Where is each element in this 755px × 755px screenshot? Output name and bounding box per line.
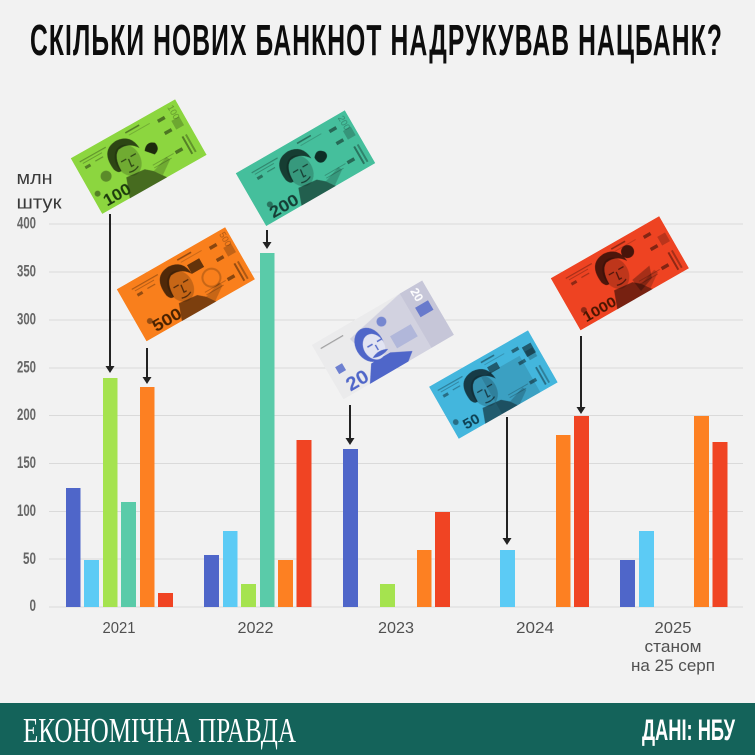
x axis year labels: 2021 (102, 620, 136, 637)
y axis labels (17, 214, 36, 615)
arrow: 200 note to 2022 teal bar (262, 230, 272, 249)
bars: 2022 (204, 253, 312, 607)
banknote: 1000: 1000 (580, 293, 620, 326)
banknote: 500 (117, 227, 257, 346)
bars: 2023 (343, 449, 450, 607)
y axis labels: 400 (17, 214, 36, 232)
banknote: 20: 20 (407, 286, 426, 304)
banknote: 50: 50 (460, 410, 483, 433)
y axis labels: 150 (17, 454, 36, 472)
banknote: 200: 200 (266, 190, 302, 222)
y axis labels: 300 (17, 310, 36, 328)
x axis year labels (102, 620, 715, 675)
y axis labels: 350 (17, 262, 36, 280)
banknote: 100: 100 (100, 179, 134, 210)
arrow: 50 note to 2024 cyan bar (502, 417, 512, 545)
bars: 2021 (66, 378, 173, 607)
arrow: 500 note to 2021 orange bar (142, 348, 152, 384)
y axis labels: 100 (17, 502, 36, 520)
banknote: 200: 200 (336, 114, 352, 132)
banknote: 50 (429, 330, 561, 445)
logo: Економічна правда: ЕКОНОМІЧНА ПРАВДА (23, 711, 297, 750)
banknote: 500: 500 (217, 230, 233, 248)
footer band (0, 703, 755, 755)
arrow: 100 note to 2021 green bar (106, 214, 114, 373)
y axis labels: 250 (17, 358, 36, 376)
y axis labels: 0 (30, 597, 36, 615)
x axis year labels: станом (644, 638, 702, 656)
banknote: 20 (312, 280, 455, 401)
x axis year labels: на 25 серп (631, 657, 715, 675)
banknote: 1000 (551, 216, 691, 334)
y axis labels: 200 (17, 406, 36, 424)
banknote: 500: 500 (149, 304, 185, 336)
axis unit label: штук (16, 192, 62, 212)
banknote: 20: 20 (343, 366, 373, 396)
x axis year labels: 2024 (516, 620, 554, 637)
arrow: 1000 note to 2024 red bar (576, 336, 586, 414)
banknote: 100: 100 (165, 103, 181, 121)
axis unit label (16, 168, 62, 212)
x axis year labels: 2023 (378, 620, 414, 637)
bars: 2024 (500, 416, 589, 607)
banknote: 100 (71, 99, 208, 216)
x axis year labels: 2022 (238, 620, 274, 637)
axis unit label: млн (16, 168, 52, 188)
arrow: 20 note to 2023 blue bar (346, 405, 354, 445)
bars: 2025 (620, 416, 728, 607)
x axis year labels: 2025 (654, 620, 692, 637)
banknote: 200 (236, 110, 378, 230)
y axis labels: 50 (23, 550, 36, 568)
